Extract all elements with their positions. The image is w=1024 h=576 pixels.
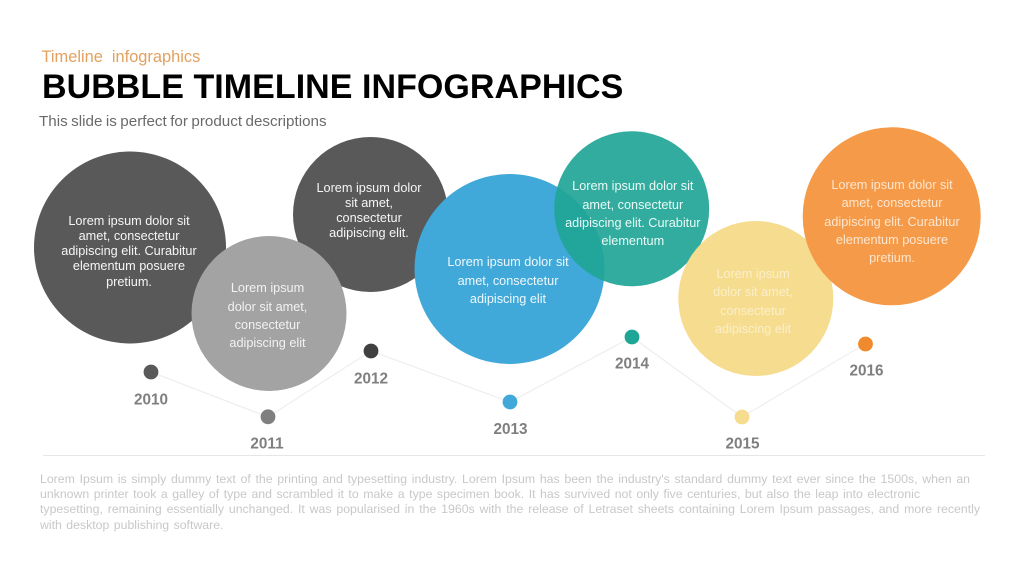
- bubble 2011: [192, 236, 346, 391]
- marker 2013: 2013: [493, 421, 528, 438]
- timeline connector line: [151, 337, 865, 417]
- bubble 2016: elementum posuere: [836, 233, 948, 247]
- bubble 2015: [678, 221, 833, 376]
- bubble 2012: [293, 137, 448, 292]
- marker 2016: 2016: [849, 362, 884, 380]
- bubble 2014: [554, 131, 709, 286]
- bubble 2015: dolor sit amet,: [713, 285, 793, 299]
- bubble 2016: [803, 127, 981, 305]
- marker 2015: 2015: [725, 436, 760, 452]
- marker 2010: [134, 365, 168, 408]
- marker 2012: 2012: [354, 370, 388, 388]
- subtitle: This slide is perfect for product descriptions: [39, 112, 327, 130]
- marker 2011: [250, 409, 284, 452]
- marker 2014: [615, 330, 650, 372]
- bubble 2012: consectetur: [336, 211, 403, 225]
- bubble 2014: adipiscing elit. Curabitur: [565, 216, 701, 230]
- bubble 2016: Lorem ipsum dolor sit: [831, 178, 953, 192]
- bubble 2016: adipiscing elit. Curabitur: [824, 215, 960, 229]
- bubble 2011: dolor sit amet,: [228, 300, 307, 314]
- marker 2016: [849, 337, 884, 380]
- bubble 2011: Lorem ipsum: [231, 281, 304, 295]
- description paragraph: [40, 472, 980, 532]
- description paragraph: unknown printer took a galley of type and scrambled it to make a type specimen book. It has survived not only five centuries, but also the leap into electronic: [40, 487, 920, 501]
- bubble 2015: Lorem ipsum: [716, 267, 790, 281]
- bubble 2010: Lorem ipsum dolor sit: [68, 214, 190, 228]
- marker 2014: 2014: [615, 356, 650, 372]
- marker 2013: [493, 395, 528, 438]
- description paragraph: with desktop publishing software.: [40, 518, 223, 532]
- bubble 2012: Lorem ipsum dolor: [316, 181, 422, 195]
- title: BUBBLE TIMELINE INFOGRAPHICS: [42, 68, 623, 106]
- eyebrow heading: Timeline infographics: [42, 48, 200, 66]
- description paragraph: typesetting, remaining essentially unchanged. It was popularised in the 1960s with the release of Letraset sheets containing Lorem Ipsum passages, and more recently: [40, 502, 980, 516]
- bubble 2010: adipiscing elit. Curabitur: [61, 244, 197, 258]
- bubble 2011: consectetur: [235, 318, 301, 332]
- bubble 2010: elementum posuere: [73, 259, 185, 273]
- bubble 2014: Lorem ipsum dolor sit: [572, 179, 694, 193]
- bubble 2012: adipiscing elit.: [329, 226, 409, 240]
- marker 2015: [725, 410, 760, 452]
- bubble 2016: pretium.: [869, 251, 915, 265]
- bubble 2012: sit amet,: [345, 196, 393, 210]
- bubble 2014: amet, consectetur: [582, 198, 684, 212]
- bubble 2010: amet, consectetur: [79, 229, 180, 243]
- bubble 2013: adipiscing elit: [470, 292, 547, 306]
- bubble 2010: pretium.: [106, 275, 152, 289]
- bubble 2015: adipiscing elit: [715, 322, 792, 336]
- bubble 2010: [34, 152, 226, 344]
- bubble 2015: consectetur: [720, 304, 787, 318]
- bubble 2013: Lorem ipsum dolor sit: [447, 255, 569, 269]
- marker 2011: 2011: [250, 436, 284, 452]
- bubble 2013: amet, consectetur: [458, 274, 559, 288]
- bubble 2016: amet, consectetur: [842, 196, 943, 210]
- marker 2012: [354, 344, 388, 388]
- bubble 2014: elementum: [601, 234, 664, 248]
- bubble 2011: adipiscing elit: [229, 336, 306, 350]
- bubble 2013: [414, 174, 604, 364]
- description paragraph: Lorem Ipsum is simply dummy text of the printing and typesetting industry. Lorem Ipsum has been the industry's standard dummy text ever since the 1500s, when an: [40, 472, 970, 486]
- marker 2010: 2010: [134, 392, 168, 408]
